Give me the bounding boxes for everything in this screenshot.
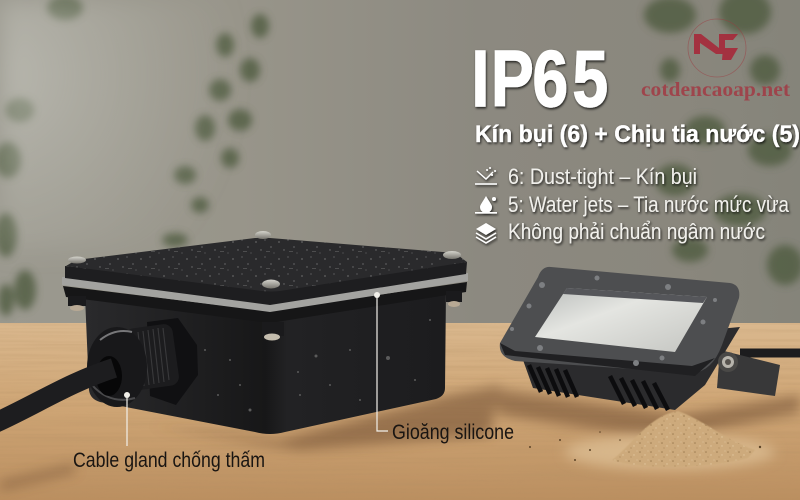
floodlight [500,267,800,410]
watermark logo [688,19,746,77]
side bolts [68,291,462,336]
watermark text: cotdencaoap.net [641,79,790,101]
power cord [740,348,800,358]
label: cable gland: Cable gland chống thấm [73,449,265,472]
label: gasket: Gioăng silicone [392,421,514,444]
mounting bracket [717,350,780,396]
background: blurred foliage [0,0,800,316]
pivot bolt [718,352,738,372]
lens [535,288,707,352]
title: IP65: IP65 [472,34,608,124]
dome nut [87,327,147,407]
icon: dust [475,168,497,184]
sand pile [529,411,775,470]
box body [85,290,446,434]
callout: gland pointer [124,392,130,446]
lamp body [500,267,739,373]
droplets on body [204,319,431,412]
spec line: not immersion: Không phải chuẩn ngâm nước [508,219,765,244]
spec line: dust-tight: 6: Dust-tight – Kín bụi [508,164,697,189]
heat sink [523,327,740,410]
callout: gasket pointer [374,292,388,431]
water droplets on lid [66,238,467,292]
lid side [65,262,467,305]
background: concrete wall [0,0,800,325]
icon: water drop [475,196,497,214]
wooden table [0,323,800,500]
hex nut [147,318,198,405]
cable gland [87,318,198,407]
shadows on table [0,385,800,490]
silicone gasket [62,273,468,312]
ribbed collar [124,323,180,391]
droplets [510,276,717,366]
junction box [62,231,468,434]
background: water mist spray [0,0,240,250]
lid top [66,238,467,292]
cable [0,368,114,423]
rim below gasket [63,282,467,323]
screws [68,231,461,288]
icon: layers [476,223,496,243]
